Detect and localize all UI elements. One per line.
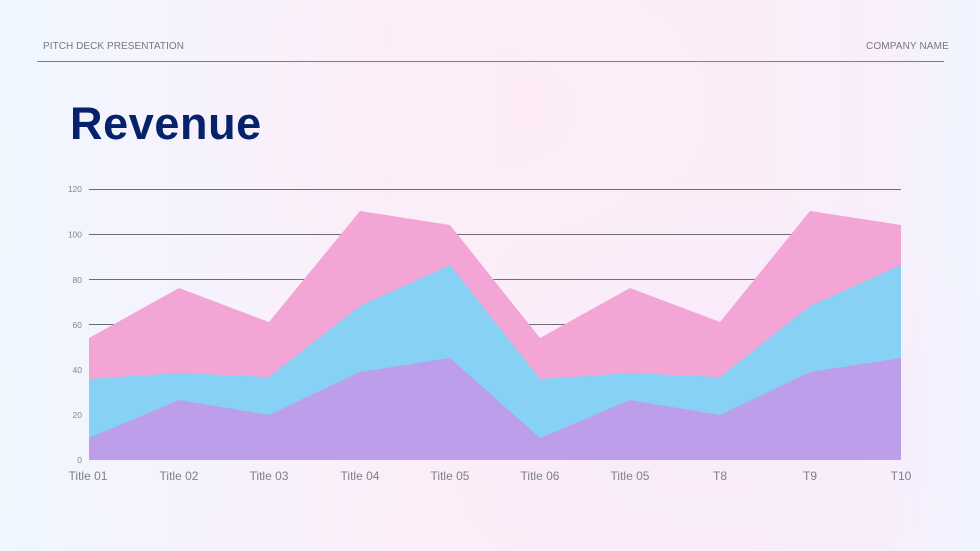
- grid lines: [89, 190, 901, 415]
- area series: pink: [89, 211, 901, 460]
- y axis labels: 80: [73, 275, 82, 285]
- x axis labels: Title 05: [431, 469, 470, 483]
- y axis labels: 40: [73, 365, 82, 375]
- y axis labels: 120: [68, 184, 82, 194]
- y axis labels: 60: [73, 320, 82, 330]
- x axis labels: Title 01: [69, 469, 108, 483]
- x axis labels: Title 03: [250, 469, 289, 483]
- y axis labels: [68, 184, 82, 465]
- header rule: [37, 61, 944, 62]
- area series: blue: [89, 265, 901, 460]
- y axis labels: 0: [77, 455, 82, 465]
- header label: company name: COMPANY NAME: [866, 41, 949, 52]
- area series: purple: [89, 358, 901, 460]
- x axis labels: T8: [713, 469, 727, 483]
- x axis labels: Title 04: [341, 469, 380, 483]
- x axis labels: T10: [891, 469, 912, 483]
- x axis labels: T9: [803, 469, 817, 483]
- x axis labels: Title 06: [521, 469, 560, 483]
- header label: pitch deck presentation: PITCH DECK PRESENTATION: [43, 41, 184, 52]
- title: Revenue: [70, 98, 262, 149]
- y axis labels: 20: [73, 410, 82, 420]
- x axis labels: Title 05: [611, 469, 650, 483]
- x axis labels: [69, 469, 912, 483]
- y axis labels: 100: [68, 230, 82, 240]
- x axis labels: Title 02: [160, 469, 199, 483]
